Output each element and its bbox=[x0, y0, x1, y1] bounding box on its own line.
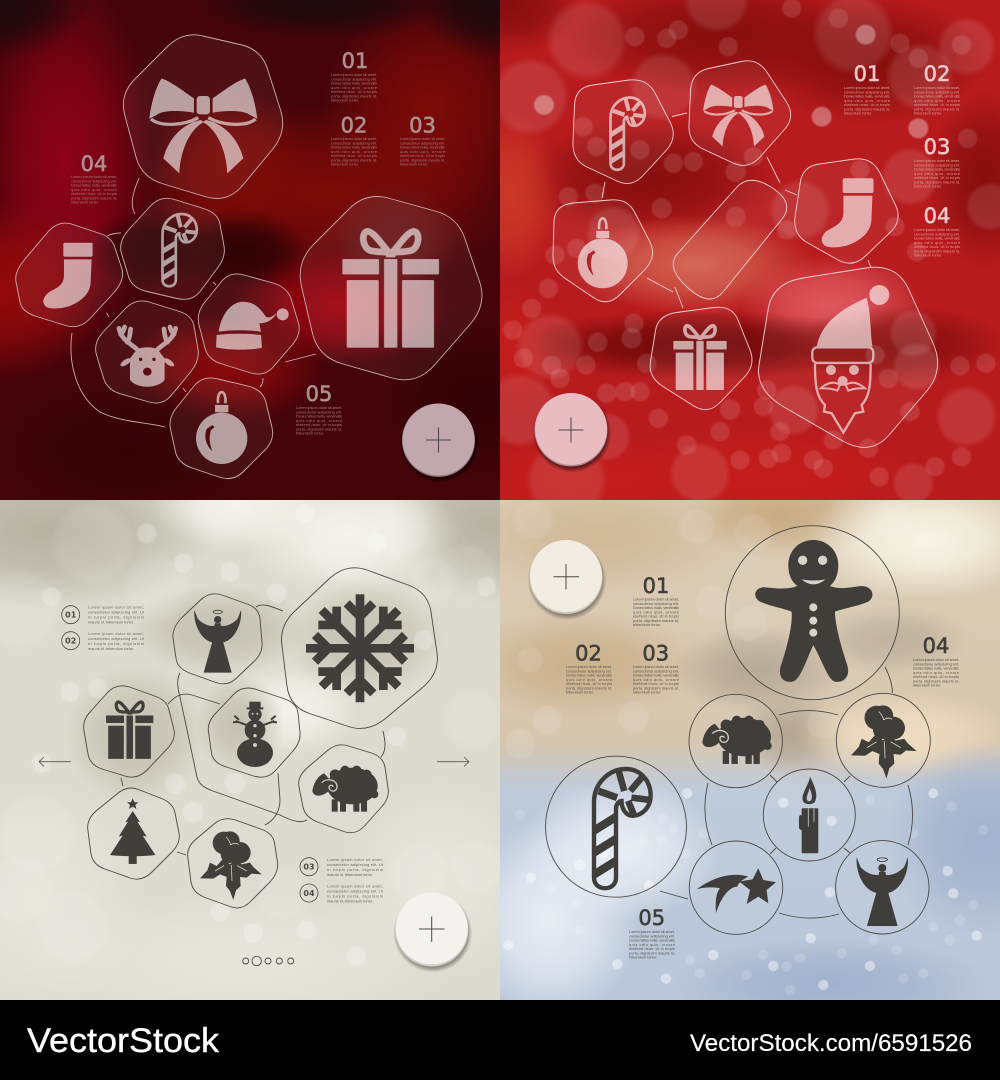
text block 01: quis odio quis, ornare bbox=[331, 85, 377, 90]
text block 03: porta, dignissim mauris id, bbox=[400, 157, 445, 162]
connector lines bbox=[71, 178, 316, 427]
text block 02: quis odio quis, ornare bbox=[331, 149, 377, 154]
background: blurred dark red bbox=[0, 0, 500, 500]
text block 03: consectetur adipiscing elit. bbox=[633, 668, 679, 673]
text block 03: Lorem ipsum dolor sit amet, bbox=[633, 664, 679, 669]
text block 01: eleifend risus. Ut in turpis bbox=[844, 102, 890, 107]
text block 04: bibendum tortor. bbox=[71, 200, 99, 205]
text block 04: eleifend risus. Ut in turpis bbox=[71, 191, 117, 196]
text block 03: quis odio quis, ornare bbox=[400, 149, 445, 154]
footer logo text: VectorStock bbox=[27, 1022, 220, 1060]
text block 02 bbox=[914, 62, 960, 116]
text block 05: Lorem ipsum dolor sit amet, bbox=[629, 929, 675, 934]
icon: bow bbox=[703, 85, 774, 146]
text block 03: Donec tellus nulla, venenatis bbox=[633, 672, 679, 678]
panel: dark red hexagon infographic bbox=[0, 0, 590, 530]
text block 01: 01 bbox=[643, 574, 669, 598]
text block 04: Lorem ipsum dolor sit amet, bbox=[913, 657, 959, 662]
list item 01: mauris id, bibendum tortor. bbox=[88, 620, 134, 624]
text block 04: bibendum tortor. bbox=[913, 683, 941, 688]
text block 04 bbox=[914, 204, 960, 258]
text block 05: bibendum tortor. bbox=[629, 955, 657, 960]
text block 03: Donec tellus nulla, venenatis bbox=[914, 166, 960, 172]
connector lines bbox=[121, 605, 385, 855]
text block 01: Donec tellus nulla, venenatis bbox=[844, 94, 890, 98]
list item 04 bbox=[300, 884, 384, 904]
text block 05 bbox=[629, 906, 675, 960]
text block 04: eleifend risus. Ut in turpis bbox=[913, 674, 959, 679]
text block 01 bbox=[633, 574, 679, 627]
text block 04: consectetur adipiscing elit. bbox=[913, 661, 959, 666]
icon: christmas tree bbox=[110, 798, 155, 864]
icon: gift box bbox=[106, 702, 153, 759]
text block 05: eleifend risus. Ut in turpis bbox=[629, 946, 675, 951]
text block 02: bibendum tortor. bbox=[914, 111, 942, 116]
text block 04: 04 bbox=[81, 152, 107, 176]
text block 01: bibendum tortor. bbox=[331, 98, 359, 103]
text block 01: porta, dignissim mauris id, bbox=[331, 93, 377, 98]
list item 01: in turpis porta, dignissim bbox=[88, 614, 144, 620]
text block 01: Lorem ipsum dolor sit amet, bbox=[844, 85, 890, 90]
panel: bright red pentagon infographic bbox=[500, 0, 1000, 500]
icon: candle bbox=[799, 777, 818, 853]
hexagon outlines bbox=[16, 35, 482, 479]
icon: reindeer bbox=[119, 327, 176, 387]
list item 03: in turpis porta, dignissim bbox=[327, 867, 383, 872]
connector lines bbox=[602, 113, 871, 308]
text block 04: consectetur adipiscing elit. bbox=[71, 178, 117, 183]
text block 02: Lorem ipsum dolor sit amet, bbox=[331, 136, 377, 141]
text block 01 bbox=[331, 49, 377, 103]
icons: gingerbread, candy cane, sheep, holly, candle, comet, angel bbox=[594, 540, 917, 926]
text block 02: Donec tellus nulla, venenatis bbox=[914, 94, 960, 98]
text block 04: porta, dignissim mauris id, bbox=[914, 248, 960, 253]
text block 03: quis odio quis, ornare bbox=[633, 677, 679, 682]
icon: angel bbox=[857, 857, 908, 926]
icon: candy cane bbox=[610, 98, 645, 170]
text block 01: quis odio quis, ornare bbox=[633, 609, 679, 614]
text block 04: Lorem ipsum dolor sit amet, bbox=[71, 174, 117, 179]
text block 01: Lorem ipsum dolor sit amet, bbox=[633, 596, 679, 602]
text block 03: 03 bbox=[642, 642, 669, 666]
list item 03: mauris id, bibendum tortor. bbox=[327, 872, 373, 877]
text block 03: quis odio quis, ornare bbox=[914, 171, 960, 176]
list item 02 bbox=[62, 631, 145, 651]
text block 02: eleifend risus. Ut in turpis bbox=[566, 681, 612, 686]
text block 04: Donec tellus nulla, venenatis bbox=[71, 182, 117, 188]
footer bar bbox=[0, 1000, 1000, 1080]
list item 02: Lorem ipsum dolor sit amet, bbox=[88, 631, 144, 636]
text block 04: Donec tellus nulla, venenatis bbox=[914, 236, 960, 240]
list item 01: Lorem ipsum dolor sit amet, bbox=[88, 604, 144, 610]
text block 03: eleifend risus. Ut in turpis bbox=[400, 153, 445, 158]
icon: holly bbox=[851, 705, 917, 778]
text block 02: Lorem ipsum dolor sit amet, bbox=[566, 664, 612, 669]
text block 03: 03 bbox=[924, 135, 950, 159]
background: gold and blue blur bbox=[460, 470, 1000, 1035]
text block 01: consectetur adipiscing elit. bbox=[844, 89, 890, 94]
text block 04: quis odio quis, ornare bbox=[914, 240, 960, 245]
panel: silver hexagon infographic bbox=[0, 500, 500, 1000]
icon: santa claus bbox=[812, 285, 889, 433]
text block 05: Lorem ipsum dolor sit amet, bbox=[296, 405, 342, 410]
text block 02: Lorem ipsum dolor sit amet, bbox=[914, 85, 960, 90]
icons: snowflake, angel, snowman, gift, sheep, tree, holly bbox=[106, 594, 414, 900]
list item 02: consectetur adipiscing elit. Ut bbox=[88, 636, 145, 641]
text block 03: eleifend risus. Ut in turpis bbox=[914, 175, 960, 180]
text block 01: Donec tellus nulla, venenatis bbox=[331, 80, 377, 86]
text block 05: quis odio quis, ornare bbox=[629, 942, 675, 947]
pagination dots bbox=[243, 956, 294, 966]
text block 02: Donec tellus nulla, venenatis bbox=[566, 672, 612, 678]
plus button bbox=[393, 892, 472, 972]
icon: santa hat bbox=[216, 302, 289, 350]
text block 03 bbox=[633, 642, 679, 695]
text block 04: Donec tellus nulla, venenatis bbox=[913, 666, 959, 670]
text block 02: consectetur adipiscing elit. bbox=[566, 668, 612, 673]
list item 01 bbox=[62, 604, 145, 624]
text block 05: bibendum tortor. bbox=[296, 431, 324, 436]
text block 01: consectetur adipiscing elit. bbox=[331, 76, 377, 81]
text block 01: consectetur adipiscing elit. bbox=[633, 601, 679, 606]
text block 03: consectetur adipiscing elit. bbox=[914, 162, 960, 167]
connector arcs bbox=[660, 667, 912, 918]
icon: stocking bbox=[43, 243, 93, 308]
text block 01: 01 bbox=[854, 62, 880, 86]
icons: candy cane, bow, ornament, stocking, gift, santa bbox=[578, 85, 889, 433]
list item 03: consectetur adipiscing elit. Ut bbox=[327, 862, 384, 867]
text block 01: 01 bbox=[342, 49, 368, 73]
text block 01: Lorem ipsum dolor sit amet, bbox=[331, 72, 377, 77]
list item 03: Lorem ipsum dolor sit amet, bbox=[327, 857, 383, 862]
icon: stocking bbox=[822, 178, 874, 247]
text block 03: Donec tellus nulla, venenatis bbox=[400, 144, 445, 150]
text block 02 bbox=[566, 642, 612, 695]
text block 01: eleifend risus. Ut in turpis bbox=[633, 614, 679, 618]
text block 01: porta, dignissim mauris id, bbox=[633, 618, 679, 623]
icon: snowflake bbox=[306, 594, 414, 702]
panel: golden-blue circle infographic bbox=[460, 470, 1000, 1035]
list item 04: 04 bbox=[303, 889, 315, 898]
text block 04: 04 bbox=[924, 204, 950, 228]
text block 01: porta, dignissim mauris id, bbox=[844, 106, 890, 111]
text block 03: 03 bbox=[409, 114, 436, 138]
icon: shooting star bbox=[697, 868, 776, 913]
text block 04 bbox=[71, 152, 117, 205]
icon: christmas ball bbox=[196, 392, 247, 464]
list item 01: 01 bbox=[65, 611, 77, 620]
list item 03: 03 bbox=[303, 863, 315, 872]
icon: gift box bbox=[673, 326, 727, 390]
text block 02: consectetur adipiscing elit. bbox=[331, 140, 377, 145]
text block 05: consectetur adipiscing elit. bbox=[629, 933, 675, 938]
text block 03 bbox=[400, 114, 445, 167]
text block 01 bbox=[844, 62, 890, 116]
text block 05: eleifend risus. Ut in turpis bbox=[296, 422, 342, 427]
text block 05: quis odio quis, ornare bbox=[296, 418, 342, 423]
text block 03: porta, dignissim mauris id, bbox=[633, 685, 679, 690]
list item 04: in turpis porta, dignissim bbox=[327, 894, 383, 898]
text block 03: bibendum tortor. bbox=[633, 690, 661, 695]
icon: holly bbox=[200, 831, 262, 900]
icon: christmas ball bbox=[578, 218, 628, 288]
text block 04: consectetur adipiscing elit. bbox=[914, 231, 960, 236]
text block 04: 04 bbox=[923, 634, 949, 658]
hexagon outlines bbox=[84, 568, 437, 908]
text block 02: quis odio quis, ornare bbox=[566, 677, 612, 682]
list item 02: mauris id, bibendum tortor. bbox=[88, 646, 134, 651]
text block 03: consectetur adipiscing elit. bbox=[400, 140, 445, 145]
list item 04: mauris id, bibendum tortor. bbox=[327, 898, 373, 904]
background: silver bokeh bbox=[0, 500, 500, 1000]
text block 02: bibendum tortor. bbox=[331, 162, 359, 167]
text block 02: 02 bbox=[924, 62, 950, 86]
text block 04: porta, dignissim mauris id, bbox=[71, 195, 117, 200]
arrow left bbox=[39, 757, 71, 766]
text block 03: porta, dignissim mauris id, bbox=[914, 179, 960, 184]
icons: bow, candy cane, stocking, reindeer, santa hat, ornament, gift bbox=[43, 78, 439, 464]
text block 03: Lorem ipsum dolor sit amet, bbox=[400, 136, 445, 141]
text block 05: 05 bbox=[306, 382, 332, 406]
icon: gingerbread man bbox=[755, 540, 872, 682]
text block 05: consectetur adipiscing elit. bbox=[296, 409, 342, 414]
text block 03: bibendum tortor. bbox=[400, 162, 428, 167]
text block 03 bbox=[914, 135, 960, 189]
text block 02: eleifend risus. Ut in turpis bbox=[914, 102, 960, 107]
plus button bbox=[400, 404, 479, 483]
text block 04: quis odio quis, ornare bbox=[913, 670, 959, 675]
text block 02: consectetur adipiscing elit. bbox=[914, 89, 960, 94]
text block 02: porta, dignissim mauris id, bbox=[331, 157, 377, 162]
list item 02: 02 bbox=[65, 637, 76, 646]
text block 01: bibendum tortor. bbox=[633, 622, 661, 627]
text block 05: Donec tellus nulla, venenatis bbox=[629, 938, 675, 942]
text block 04: bibendum tortor. bbox=[914, 253, 942, 258]
text block 04: Lorem ipsum dolor sit amet, bbox=[914, 227, 960, 232]
list item 03 bbox=[300, 857, 384, 877]
circle outlines bbox=[546, 526, 930, 934]
text block 04: porta, dignissim mauris id, bbox=[913, 678, 959, 683]
arrow right bbox=[437, 757, 469, 766]
text block 02: bibendum tortor. bbox=[566, 690, 594, 695]
plus button bbox=[528, 540, 606, 620]
list item 02: in turpis porta, dignissim bbox=[88, 641, 144, 646]
plus button bbox=[532, 393, 612, 472]
text block 01: bibendum tortor. bbox=[844, 111, 872, 116]
text block 02: 02 bbox=[575, 642, 602, 666]
text block 01: eleifend risus. Ut in turpis bbox=[331, 89, 377, 94]
icon: bow bbox=[149, 78, 257, 173]
text block 02: quis odio quis, ornare bbox=[914, 98, 960, 103]
text block 03: eleifend risus. Ut in turpis bbox=[633, 681, 679, 686]
icon: snowman bbox=[233, 702, 277, 767]
text block 03: Lorem ipsum dolor sit amet, bbox=[914, 158, 960, 163]
text block 04 bbox=[913, 634, 959, 688]
background: red bokeh bbox=[500, 0, 1000, 500]
list item 04: consectetur adipiscing elit. Ut bbox=[327, 888, 384, 894]
text block 02: eleifend risus. Ut in turpis bbox=[331, 153, 377, 158]
text block 05: porta, dignissim mauris id, bbox=[296, 426, 342, 431]
text block 05 bbox=[296, 382, 342, 436]
list item 01: consectetur adipiscing elit. Ut bbox=[88, 610, 145, 614]
icon: sheep bbox=[702, 716, 772, 764]
text block 05: Donec tellus nulla, venenatis bbox=[296, 414, 342, 418]
text block 05: 05 bbox=[638, 906, 665, 930]
text block 05: porta, dignissim mauris id, bbox=[629, 950, 675, 955]
text block 02: Donec tellus nulla, venenatis bbox=[331, 144, 377, 150]
icon: gift box bbox=[342, 231, 439, 348]
footer image id: VectorStock.com/6591526 bbox=[690, 1030, 972, 1057]
text block 04: eleifend risus. Ut in turpis bbox=[914, 244, 960, 249]
icon: angel bbox=[194, 610, 241, 673]
text block 01: Donec tellus nulla, venenatis bbox=[633, 605, 679, 610]
text block 02: porta, dignissim mauris id, bbox=[914, 106, 960, 111]
text block 04: quis odio quis, ornare bbox=[71, 187, 117, 192]
icon: sheep bbox=[312, 766, 378, 812]
text block 02 bbox=[331, 114, 377, 167]
icon: candy cane bbox=[162, 214, 197, 286]
icon: candy cane bbox=[594, 769, 651, 888]
text block 02: porta, dignissim mauris id, bbox=[566, 685, 612, 690]
pentagon outlines bbox=[553, 61, 938, 447]
text block 01: quis odio quis, ornare bbox=[844, 98, 890, 103]
text block 03: bibendum tortor. bbox=[914, 184, 942, 189]
list item 04: Lorem ipsum dolor sit amet, bbox=[327, 884, 383, 888]
text block 02: 02 bbox=[341, 114, 367, 138]
